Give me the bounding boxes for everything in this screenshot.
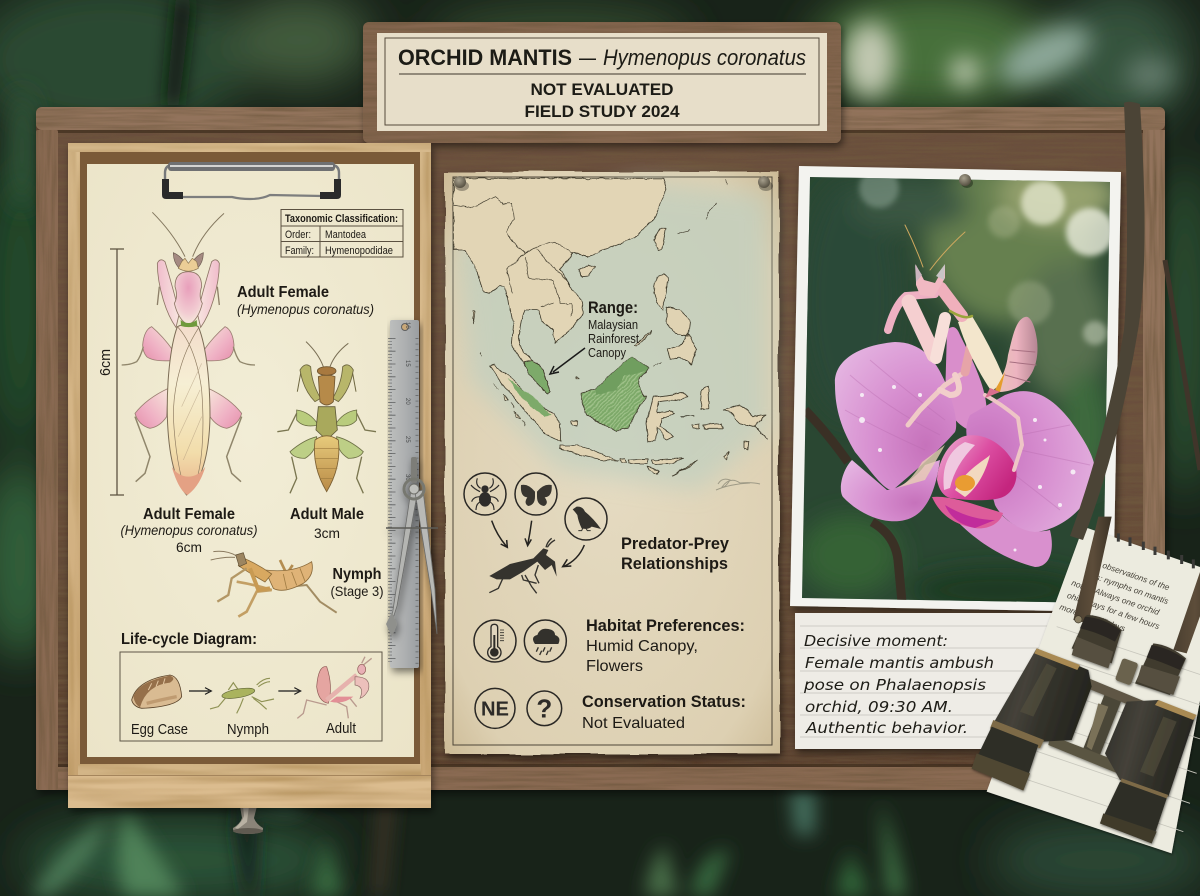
notebook handwriting: ions: nymphs on mantis: [1084, 568, 1170, 606]
label: nymph: [330, 566, 384, 599]
drafting compass: [386, 457, 438, 637]
notebook handwriting: more fast still days: [1058, 602, 1127, 634]
wooden display board: [36, 107, 1165, 790]
inner border: [453, 177, 772, 745]
drawer tray: [68, 143, 431, 808]
arrow: spider to mantis: [492, 521, 507, 547]
taxonomy table: Hymenopodidae: [325, 245, 393, 257]
highlighted peninsula: [523, 360, 550, 394]
cartographer signature: [716, 479, 760, 490]
orchid stem: [805, 410, 902, 602]
photo mantis: [888, 225, 1038, 470]
plaque border: [385, 38, 819, 125]
java and sunda islands: [560, 445, 698, 475]
icon: bird: [565, 498, 607, 540]
drawer knob: [233, 806, 263, 834]
title text: ORCHID MANTIS: [398, 45, 572, 70]
habitat preferences text: Humid Canopy,: [586, 638, 698, 655]
steel ruler: 30: [404, 474, 410, 481]
center hinge: [1083, 693, 1122, 755]
field study line: FIELD STUDY 2024: [524, 102, 680, 121]
panel: map parchment: [445, 172, 779, 754]
left barrel: [993, 648, 1092, 742]
label: nymph: Nymph: [332, 566, 382, 583]
photo frame: [790, 166, 1121, 612]
notebook spiral: [1118, 533, 1193, 568]
life-cycle adult: [297, 657, 372, 718]
notebook handwriting: d observations of the: [1095, 558, 1171, 592]
label: adult stage: Adult: [326, 721, 356, 737]
icon: spider: [464, 473, 506, 515]
label: adult female side: (Hymenopus coronatus): [237, 301, 374, 317]
habitat preferences text: Habitat Preferences:: [586, 617, 745, 635]
plaque paper: [377, 33, 827, 131]
label: adult female caption: (Hymenopus coronatus): [120, 522, 258, 538]
philippines: [653, 273, 697, 365]
panel: photograph: [790, 155, 1125, 612]
taiwan and hainan: [579, 228, 666, 277]
icon: NE status: [475, 688, 515, 728]
conservation status text: Not Evaluated: [582, 715, 685, 732]
foreground strap over photo: [1070, 102, 1145, 540]
icon: thermometer: [474, 620, 516, 662]
handwritten caption: [803, 632, 994, 737]
label: adult female caption: [120, 506, 258, 555]
mainland: [453, 178, 667, 392]
eyepiece left: [1072, 615, 1122, 663]
arrow: egg to nymph: [189, 688, 211, 694]
icon: mantis silhouette: [489, 538, 557, 593]
life-cycle nymph: [210, 678, 274, 713]
icon: butterfly: [515, 473, 557, 515]
food web icons: [464, 473, 607, 728]
binoculars: [972, 615, 1197, 843]
icon: question mark: [527, 691, 562, 726]
title plaque: [363, 22, 841, 143]
arrow: range pointer: [550, 348, 585, 374]
range label: Rainforest: [588, 332, 639, 346]
handwritten caption: orchid, 09:30 AM.: [805, 698, 953, 716]
borneo: [582, 357, 648, 430]
notebook handwriting: ohia: stays for a few hours: [1066, 590, 1161, 631]
size scale bar: [100, 248, 124, 496]
title text: —: [579, 45, 596, 70]
taxonomy table: Mantodea: [325, 229, 367, 241]
taxonomy table: [281, 210, 403, 257]
sumatra: [490, 365, 561, 442]
steel ruler: 25: [404, 436, 410, 443]
field notebook and binoculars: [972, 517, 1200, 853]
range label: [588, 298, 639, 360]
icon: question mark: ?: [536, 694, 552, 724]
parchment sheet: [445, 172, 779, 754]
label: nymph: (Stage 3): [330, 583, 384, 599]
title text: [398, 50, 806, 70]
map: southeast asia: [453, 178, 767, 475]
label: adult male: Adult Male: [290, 506, 364, 523]
leather strap behind: [1165, 260, 1200, 470]
taxonomy table: Order:: [285, 229, 311, 241]
title text: Hymenopus coronatus: [603, 45, 806, 70]
right barrel: [1105, 700, 1195, 797]
notebook page: [987, 527, 1200, 853]
photo scene: [795, 155, 1125, 612]
sea wash: [456, 182, 768, 490]
status line: NOT EVALUATED: [530, 80, 674, 99]
metal clip: [162, 162, 341, 199]
taxonomy table: Family:: [285, 245, 314, 257]
egg case: [132, 675, 182, 708]
range label: Canopy: [588, 346, 627, 360]
small islands: [473, 180, 728, 425]
label: adult male: [290, 508, 364, 538]
label: adult female caption: Adult Female: [143, 506, 235, 523]
eyepiece right: [1135, 643, 1186, 695]
photo pin: [959, 174, 973, 188]
notebook handwriting: notes: Always one orchid: [1070, 578, 1161, 617]
illustration: adult male mantis: [277, 342, 376, 493]
icon: NE status: NE: [481, 699, 509, 721]
arrow: bird to mantis: [563, 545, 584, 567]
range label: Malaysian: [588, 318, 638, 332]
illustration: adult female mantis: [122, 212, 255, 495]
steel ruler: 10: [404, 322, 410, 329]
handwritten caption: Authentic behavior.: [805, 719, 968, 737]
label: egg case: Egg Case: [131, 722, 188, 738]
heading: predator-prey: Predator-Prey: [621, 535, 730, 553]
range label: Range:: [588, 298, 638, 317]
conservation status text: [582, 693, 746, 732]
label: nymph stage: Nymph: [227, 722, 269, 738]
heading: life-cycle diagram: Life-cycle Diagram:: [121, 631, 257, 648]
heading: predator-prey: [621, 535, 730, 573]
steel ruler: 15: [404, 360, 410, 367]
heading: predator-prey: Relationships: [621, 555, 728, 573]
steel ruler: 20: [404, 398, 410, 405]
panel: specimen drawer clipboard: [68, 143, 431, 834]
conservation status text: Conservation Status:: [582, 693, 746, 711]
icon: rain cloud: [524, 620, 566, 662]
label: adult female side: Adult Female: [237, 284, 329, 301]
handwritten caption: Female mantis ambush: [805, 654, 994, 672]
moluccas and new guinea: [680, 387, 767, 460]
taxonomy table: Taxonomic Classification:: [285, 213, 398, 225]
arrow: nymph to adult: [278, 688, 301, 694]
orchid flower: [835, 327, 1096, 567]
label: adult female caption: 6cm: [176, 539, 202, 555]
diagram: life cycle: [120, 652, 382, 741]
illustration: nymph: [211, 551, 337, 617]
caption card: [795, 613, 1065, 749]
steel ruler: [390, 320, 419, 668]
handwritten caption: Decisive moment:: [804, 632, 948, 650]
notebook handwriting: [1058, 551, 1174, 644]
sulawesi: [646, 393, 687, 442]
binocular straps: [1073, 517, 1200, 653]
label: adult female side: [237, 284, 374, 317]
label: adult male: 3cm: [314, 525, 340, 541]
map pins: [454, 176, 773, 191]
habitat preferences text: Flowers: [586, 658, 643, 675]
paper sheet: [87, 164, 414, 757]
habitat preferences text: [586, 617, 745, 675]
arrow: butterfly to mantis: [525, 521, 532, 546]
size scale bar: 6cm: [97, 349, 114, 376]
handwritten caption: pose on Phalaenopsis: [803, 676, 986, 694]
